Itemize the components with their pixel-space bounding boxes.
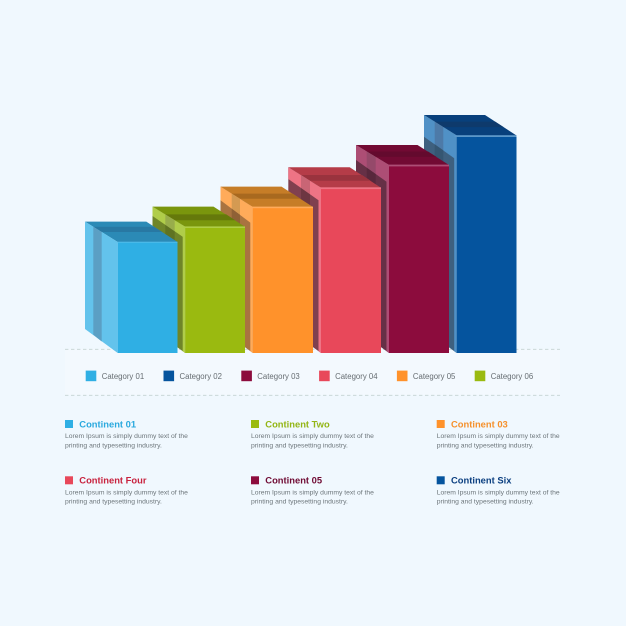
legend item: Category 05 [397, 371, 456, 381]
text block: Continent Six [437, 475, 560, 506]
bar chart [85, 115, 516, 353]
legend item: Category 05: Category 05 [413, 372, 456, 381]
legend item: Category 02: Category 02 [180, 372, 222, 381]
bar 2: green [152, 207, 245, 353]
text block: Continent 03: Lorem Ipsum is simply dummy text of the [437, 433, 560, 440]
bar 5: maroon [356, 145, 449, 353]
text block: Continent Two [251, 418, 374, 449]
text block: Continent Four [65, 475, 188, 506]
bar 1: blue [85, 222, 178, 353]
text block: Continent 03: Continent 03 [451, 418, 508, 429]
text block: Continent 01: printing and typesetting industry. [65, 442, 162, 449]
text block: Continent Two: printing and typesetting industry. [251, 442, 348, 449]
text block: Continent 05: Lorem Ipsum is simply dummy text of the [251, 489, 374, 496]
legend item: Category 03 [241, 371, 300, 381]
text block: Continent 05: printing and typesetting industry. [251, 499, 348, 506]
text block: Continent Two: Lorem Ipsum is simply dummy text of the [251, 433, 374, 440]
legend [86, 371, 533, 381]
text block: Continent Four: Continent Four [79, 475, 147, 486]
text block: Continent Six: Continent Six [451, 475, 512, 486]
text block: Continent 03: printing and typesetting industry. [437, 442, 534, 449]
bar 4: red [288, 167, 381, 353]
legend item: Category 02 [164, 371, 222, 381]
text block: Continent Four: Lorem Ipsum is simply dummy text of the [65, 489, 188, 496]
bar 6: navy [424, 115, 516, 353]
bar 3: orange [220, 187, 313, 353]
legend item: Category 04: Category 04 [335, 372, 378, 381]
text block: Continent Six: printing and typesetting industry. [437, 499, 534, 506]
text block: Continent Two: Continent Two [265, 418, 330, 429]
text block: Continent 01 [65, 418, 188, 449]
legend item: Category 06: Category 06 [491, 372, 533, 381]
text block: Continent Six: Lorem Ipsum is simply dummy text of the [437, 489, 560, 496]
text block: Continent 01: Continent 01 [79, 418, 136, 429]
legend item: Category 06 [475, 371, 533, 381]
legend item: Category 01: Category 01 [102, 372, 144, 381]
text block: Continent 05: Continent 05 [265, 475, 322, 486]
legend item: Category 01 [86, 371, 144, 381]
legend item: Category 03: Category 03 [257, 372, 300, 381]
text block: Continent 01: Lorem Ipsum is simply dummy text of the [65, 433, 188, 440]
text block: Continent 05 [251, 475, 374, 506]
legend item: Category 04 [319, 371, 378, 381]
text block: Continent Four: printing and typesetting industry. [65, 499, 162, 506]
text block: Continent 03 [437, 418, 560, 449]
